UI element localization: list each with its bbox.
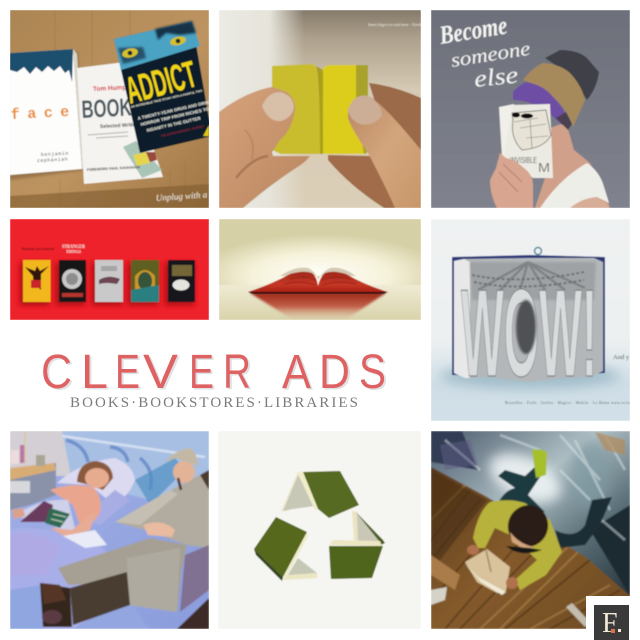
panel: couple in bed, detective reading scene [10, 431, 209, 629]
title: CLEVER ADS: A [282, 346, 311, 399]
hands holding the book [490, 153, 533, 208]
right hand [328, 83, 421, 208]
book: Bookends: FOREWORD PAUL KAVANAGH [87, 165, 140, 172]
detective in tweed coat [40, 448, 209, 627]
book: yellow silhouette [23, 260, 50, 302]
yellow book [272, 64, 368, 154]
book: lower left [254, 517, 317, 581]
book: Bookends: Tom Humph [93, 84, 131, 93]
panel: Stranger Things book ad on red [10, 219, 209, 320]
red background [10, 219, 209, 320]
panel: open red book shaped like lips [219, 219, 421, 320]
city scene [431, 431, 630, 596]
reader yellow jacket [473, 500, 562, 590]
book: green and teal forest [131, 260, 159, 302]
floor objects [431, 555, 590, 627]
dark interior of the letter O [516, 300, 536, 354]
sleeping woman [12, 461, 113, 548]
title: CLEVER ADS: E [189, 346, 214, 399]
cream backdrop with horizon [219, 219, 421, 320]
headline: because you watched Stranger Things: STRANGER [62, 245, 85, 250]
book: Bookends: Selected Writing [100, 122, 139, 130]
title: CLEVER ADS: S [359, 346, 386, 399]
title: CLEVER ADS: R [223, 346, 251, 399]
panel: folded book pages spelling WOW [431, 219, 632, 421]
book: black with white brain [168, 260, 195, 302]
book shadow [440, 364, 620, 388]
reader legs and boots [498, 449, 612, 548]
bedroom wall and bedding [10, 431, 209, 629]
book: top [281, 471, 359, 518]
pale blue backdrop [431, 219, 630, 421]
panel: face, Bookends and Addict books on a wooden table [10, 10, 224, 208]
handwritten slogan: someone [449, 38, 532, 72]
grey backdrop [431, 10, 630, 208]
book reflection [250, 293, 386, 320]
row of five books with shadows [20, 260, 195, 305]
side copy: And y [613, 354, 630, 361]
title: CLEVER ADS [41, 346, 386, 399]
book cover held over the face: M [538, 160, 550, 175]
book: Bookends [77, 62, 163, 184]
caption: Unplug with a book: Unplug with a boo [155, 188, 224, 203]
navy book cover [452, 248, 605, 376]
title: CLEVER ADS: D [319, 346, 350, 399]
book: face [10, 49, 86, 180]
bed frame and side [177, 545, 209, 629]
title: CLEVER ADS: C [41, 346, 72, 399]
subtitle: Books, Bookstores, Libraries: BOOKS·BOOKSTORES·LIBRARIES [70, 395, 358, 411]
title: CLEVER ADS: L [81, 346, 108, 399]
head wrap [513, 50, 599, 130]
book: Bookends: BOOK [81, 93, 132, 124]
handwritten slogan: Become [437, 11, 509, 50]
book: Addict: THE EXTRAORDINARY JOURNEY [160, 124, 205, 138]
book: Addict: A TWENTY-YEAR DRUG AND DRINK [137, 99, 213, 121]
book: Addict: AN INCREDIBLE TRUE STORY WITH A PAINFUL TWO [130, 88, 203, 109]
caption: small italic line: Smart fingers to read more · October 20 [368, 23, 429, 27]
book: face: benjamin [41, 151, 69, 158]
open book on the woman [20, 501, 70, 528]
book: black and white bowl [59, 260, 86, 302]
book: silver cover [95, 260, 123, 302]
open red book [248, 268, 388, 294]
book cover held over the face [499, 104, 553, 178]
left hand [219, 87, 310, 208]
panel: green books forming a recycling symbol [218, 431, 421, 629]
wooden floor [431, 431, 630, 629]
panel: thumbs holding a yellow book [219, 10, 429, 208]
woman's neck and body [535, 122, 610, 208]
headline: because you watched Stranger Things [22, 245, 85, 254]
soft backdrop [219, 10, 421, 208]
bottom address line: Bruxelles · Forêt · Ixelles · Magico · Mobile · La Haine www.ecrire [505, 401, 632, 405]
panel: Become someone else, book cover as a face [431, 10, 630, 208]
book: lower right [329, 510, 385, 579]
headline: because you watched Stranger Things: Because you watched [22, 247, 54, 251]
pillows [57, 458, 135, 525]
fanned pages [454, 258, 603, 382]
open book and hands [464, 545, 518, 595]
reader head [502, 499, 554, 553]
title: CLEVER ADS: V [143, 346, 178, 399]
panel: man reading on the floor, city scene bending away [431, 431, 630, 629]
logo badge: F [602, 608, 618, 639]
book: face: face [10, 104, 77, 124]
book cover held over the face: INVISIBLE [510, 156, 537, 165]
handwritten slogan [440, 21, 530, 88]
book: Addict: ADDICT [121, 54, 201, 113]
headline: because you watched Stranger Things: THINGS [66, 249, 81, 254]
book: face: zephaniah [37, 156, 68, 164]
book: Addict: INSANITY IN THE GUTTER [146, 115, 202, 133]
handwritten slogan: else [473, 62, 520, 93]
title: CLEVER ADS: E [115, 346, 140, 399]
book: Addict: HORROR TRIP FROM RICHES TO [140, 106, 210, 127]
book: Addict [114, 21, 213, 153]
logo badge [586, 596, 640, 640]
nightstand with objects [10, 431, 56, 510]
wooden table surface [10, 10, 209, 208]
off-white backdrop [218, 431, 421, 629]
